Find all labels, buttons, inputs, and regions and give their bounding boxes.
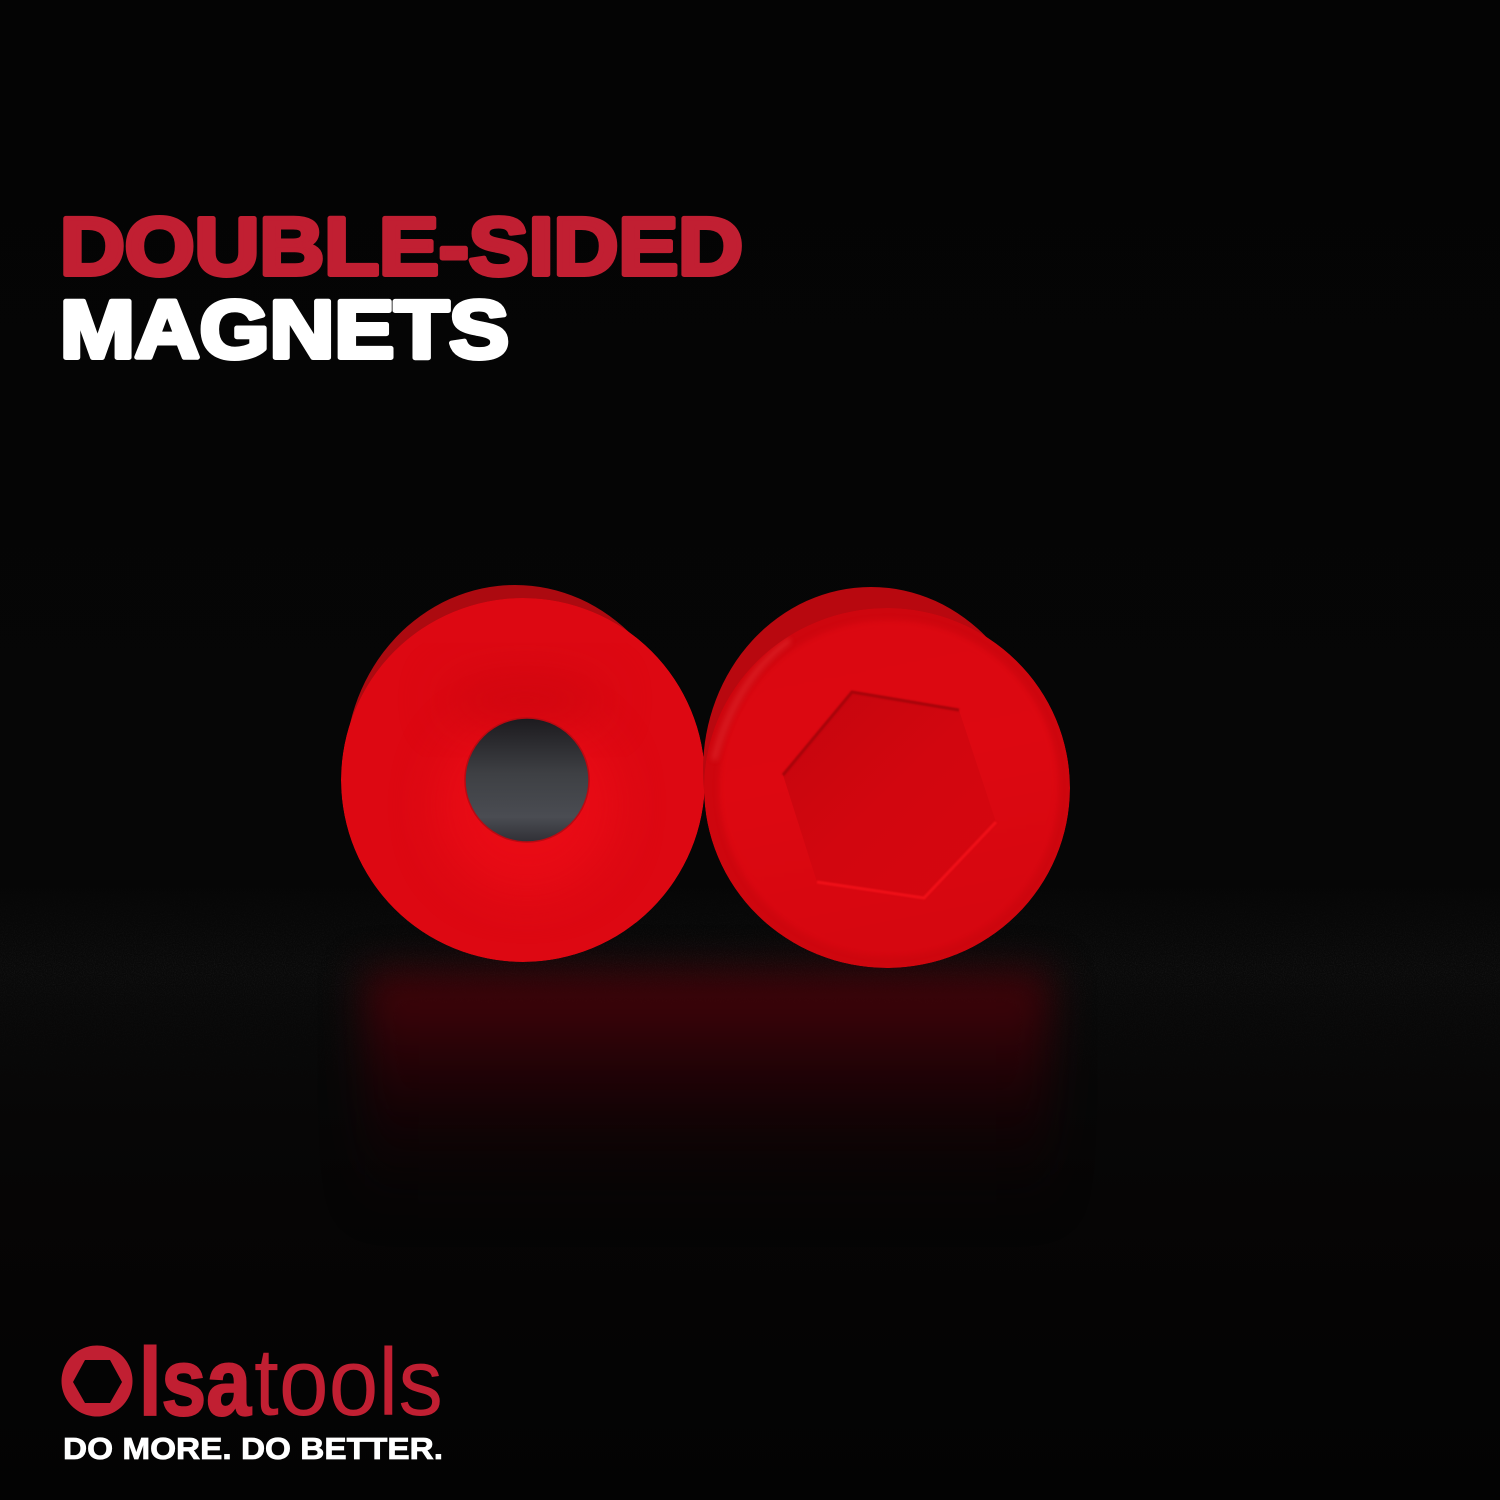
- title line 1: DOUBLE-SIDED: [60, 202, 743, 292]
- left magnet centre hole: [465, 718, 589, 842]
- right magnet rim and face: [704, 608, 1070, 968]
- logo icon: hexagon O: [62, 1346, 133, 1416]
- magnet: right, hexagon recess face: [703, 587, 1070, 968]
- floor texture: [1, 938, 1500, 992]
- magnet: left, ring face with grey centre: [341, 585, 705, 962]
- floor reflection: [365, 972, 1050, 1212]
- logo wordmark: tools: [254, 1329, 443, 1436]
- left magnet back disc: [345, 585, 685, 951]
- title: [60, 202, 743, 376]
- logo: [62, 1329, 443, 1436]
- hexagon recess: [783, 692, 996, 898]
- logo wordmark: lsa: [139, 1329, 252, 1436]
- tagline: DO MORE. DO BETTER.: [63, 1431, 443, 1466]
- right magnet back disc: [703, 587, 1039, 953]
- logo wordmark: O: [62, 1398, 78, 1420]
- title line 2: MAGNETS: [60, 284, 509, 376]
- left magnet front face: [341, 598, 705, 962]
